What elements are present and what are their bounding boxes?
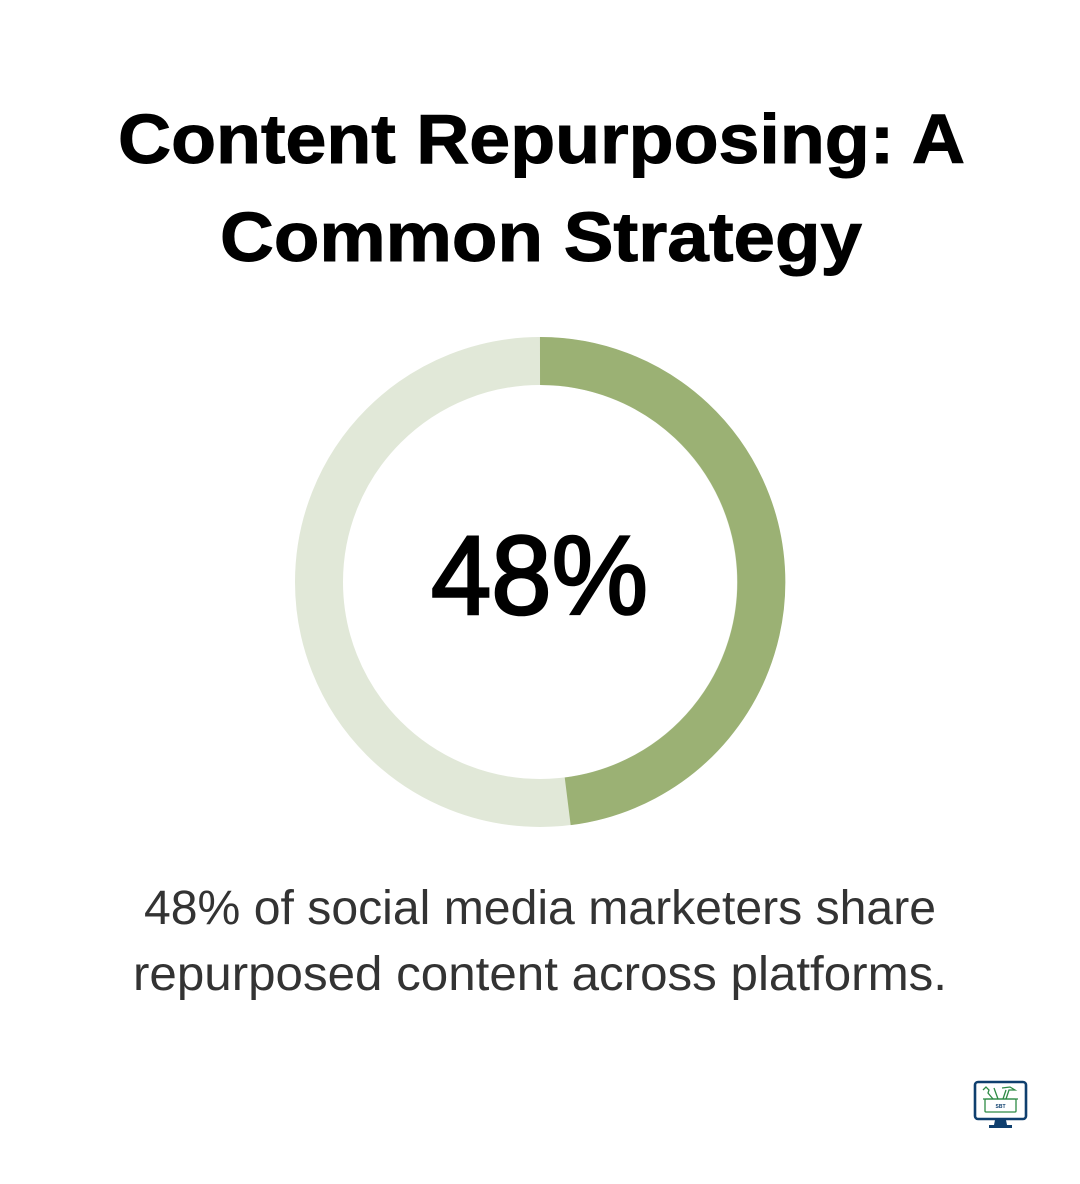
- toolbox label: SBT: [996, 1104, 1006, 1110]
- monitor screen: [975, 1082, 1026, 1119]
- title: Common Strategy: [220, 198, 862, 276]
- monitor stand: [989, 1120, 1012, 1128]
- donut chart: 48%: [319, 361, 761, 803]
- icon: monitor with toolbox logo: [975, 1082, 1026, 1128]
- title: [118, 100, 965, 276]
- description text: 48% of social media marketers share: [144, 882, 936, 935]
- description text: [133, 882, 947, 1001]
- toolbox: [983, 1087, 1018, 1112]
- title: Content Repurposing: A: [118, 100, 965, 178]
- donut center value: 48%: [431, 513, 648, 638]
- description text: repurposed content across platforms.: [133, 948, 947, 1001]
